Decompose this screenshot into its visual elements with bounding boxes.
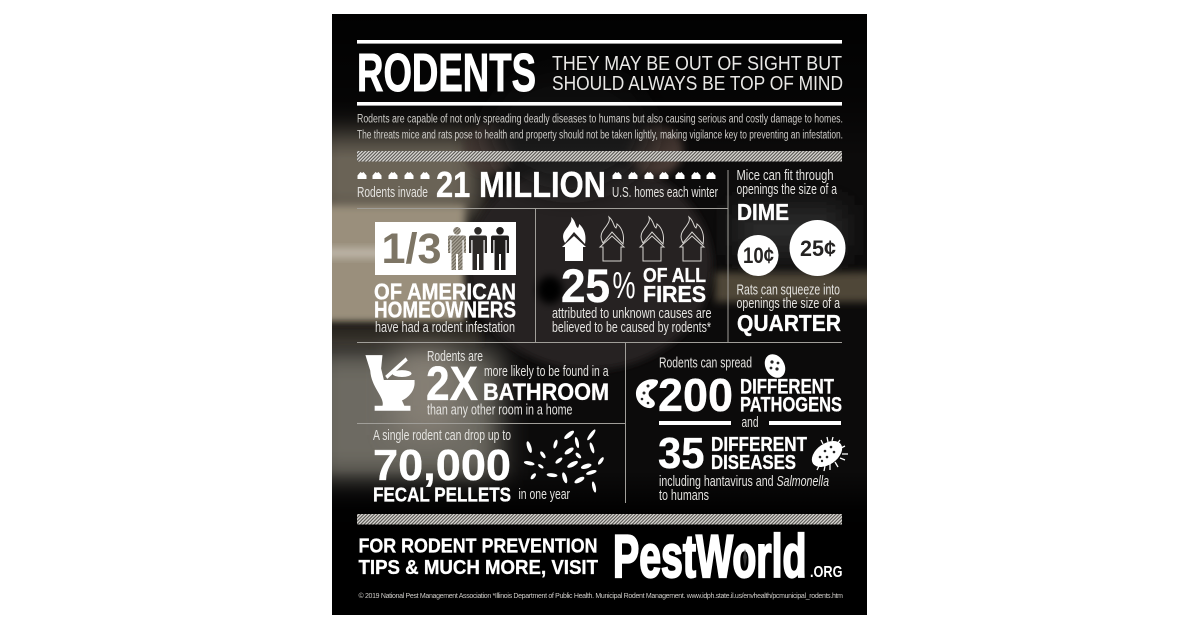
call to action: TIPS & MUCH MORE, VISIT [358, 556, 598, 579]
icon row: right houses [612, 172, 716, 179]
panel: dime and quarter: openings the size of a [736, 295, 840, 312]
caption: have had a rodent infestation [375, 320, 515, 336]
label right: U.S. homes each winter [612, 184, 718, 201]
panel: one third of homeowners [374, 222, 516, 336]
panel: fecal pellets: in one year [518, 487, 570, 503]
200: 200 [658, 369, 733, 421]
panel: bathroom: than any other room in a home [427, 402, 572, 418]
panel: bathroom [365, 348, 609, 418]
icon: toilet [365, 355, 415, 411]
panel: dime and quarter: openings the size of a [736, 181, 837, 198]
panel: fires: % [612, 265, 636, 307]
top rule [357, 40, 842, 44]
different pathogens: DIFFERENT [740, 376, 834, 398]
icon: bean bacterium [636, 379, 658, 408]
intro paragraph: The threats mice and rats pose to health and property should not be taken lightly, making vigilance key to preventing an infestation. [357, 130, 843, 142]
icon: 10 cent coin: 10¢ [743, 243, 774, 268]
panel: dime and quarter [736, 167, 846, 336]
intro paragraph [357, 114, 843, 142]
big number: 21 MILLION [436, 164, 606, 205]
tagline: THEY MAY BE OUT OF SIGHT BUT [552, 52, 842, 75]
icon: virus [807, 436, 848, 472]
second rule [357, 102, 842, 106]
call to action [358, 534, 598, 579]
panel: pathogens and diseases: PATHOGENS [740, 394, 842, 416]
icon: burning houses [562, 217, 704, 261]
text: rodents can spread: Rodents can spread [659, 354, 752, 372]
footnote: © 2019 National Pest Management Association *Illinois Department of Public Health. Municipal Rodent Management. www.idph.state.il.us/envhealth/pcmunicipal_rodents.htm [358, 592, 843, 600]
panel: fires: FIRES [643, 281, 706, 307]
icon: 10 cent coin [738, 235, 778, 276]
text: A single rodent can drop up to [373, 427, 511, 444]
panel: bathroom: 2X [426, 358, 478, 411]
photo background: rat close-up [310, 14, 880, 615]
intro paragraph: Rodents are capable of not only spreading deadly diseases to humans but also causing serious and costly damage to homes. [357, 114, 843, 126]
icon: 25 cent coin: 25¢ [800, 236, 836, 261]
different diseases: DIFFERENT [711, 434, 807, 456]
icon row: left houses [358, 172, 430, 179]
icon: round bacterium [761, 350, 789, 382]
panel dividers [357, 170, 842, 503]
icon: pellets [524, 428, 605, 493]
panel: pathogens and diseases [636, 350, 848, 504]
hatched band bottom [357, 514, 842, 524]
panel: one third of homeowners: HOMEOWNERS [374, 296, 516, 322]
panel: bathroom: BATHROOM [483, 379, 609, 406]
panel: fires [552, 217, 712, 336]
title: RODENTS [357, 43, 536, 103]
35: 35 [658, 429, 704, 478]
panel: fecal pellets: 70,000 [373, 441, 511, 490]
panel: pathogens and diseases: to humans [659, 487, 709, 504]
icon: 25 cent coin [790, 220, 846, 276]
tagline: SHOULD ALWAYS BE TOP OF MIND [552, 72, 843, 95]
of all fires: OF ALL [643, 264, 706, 287]
tagline [552, 52, 843, 95]
and separator: and [742, 415, 758, 431]
dime: DIME [737, 199, 789, 225]
logo: PestWorld.org: PestWorld [613, 523, 806, 590]
panel: fires: believed to be caused by rodents* [552, 320, 711, 336]
call to action: FOR RODENT PREVENTION [358, 534, 598, 558]
caption: attributed to unknown causes are [552, 306, 712, 322]
hatched band top [357, 151, 842, 162]
logo: PestWorld.org: .ORG [810, 564, 842, 581]
quarter: QUARTER [737, 310, 841, 336]
panel: bathroom: more likely to be found in a [484, 363, 609, 380]
headline: OF AMERICAN [374, 278, 516, 304]
rats text: Rats can squeeze into [736, 282, 840, 298]
label left: Rodents invade [357, 184, 428, 201]
mice text: Mice can fit through [736, 167, 834, 184]
white box with 1/3 and people [375, 222, 516, 275]
caption: including hantavirus and Salmonella [659, 473, 829, 490]
text: Rodents are [427, 348, 483, 365]
panel: fecal pellets [373, 427, 605, 506]
panel: fecal pellets: FECAL PELLETS [373, 484, 511, 506]
25 percent: 25 [561, 259, 610, 312]
white box with 1/3 and people: 1/3 [382, 225, 442, 273]
and separator [659, 415, 841, 431]
stat: 21 million homes [357, 164, 718, 205]
panel: pathogens and diseases: DISEASES [711, 452, 796, 474]
